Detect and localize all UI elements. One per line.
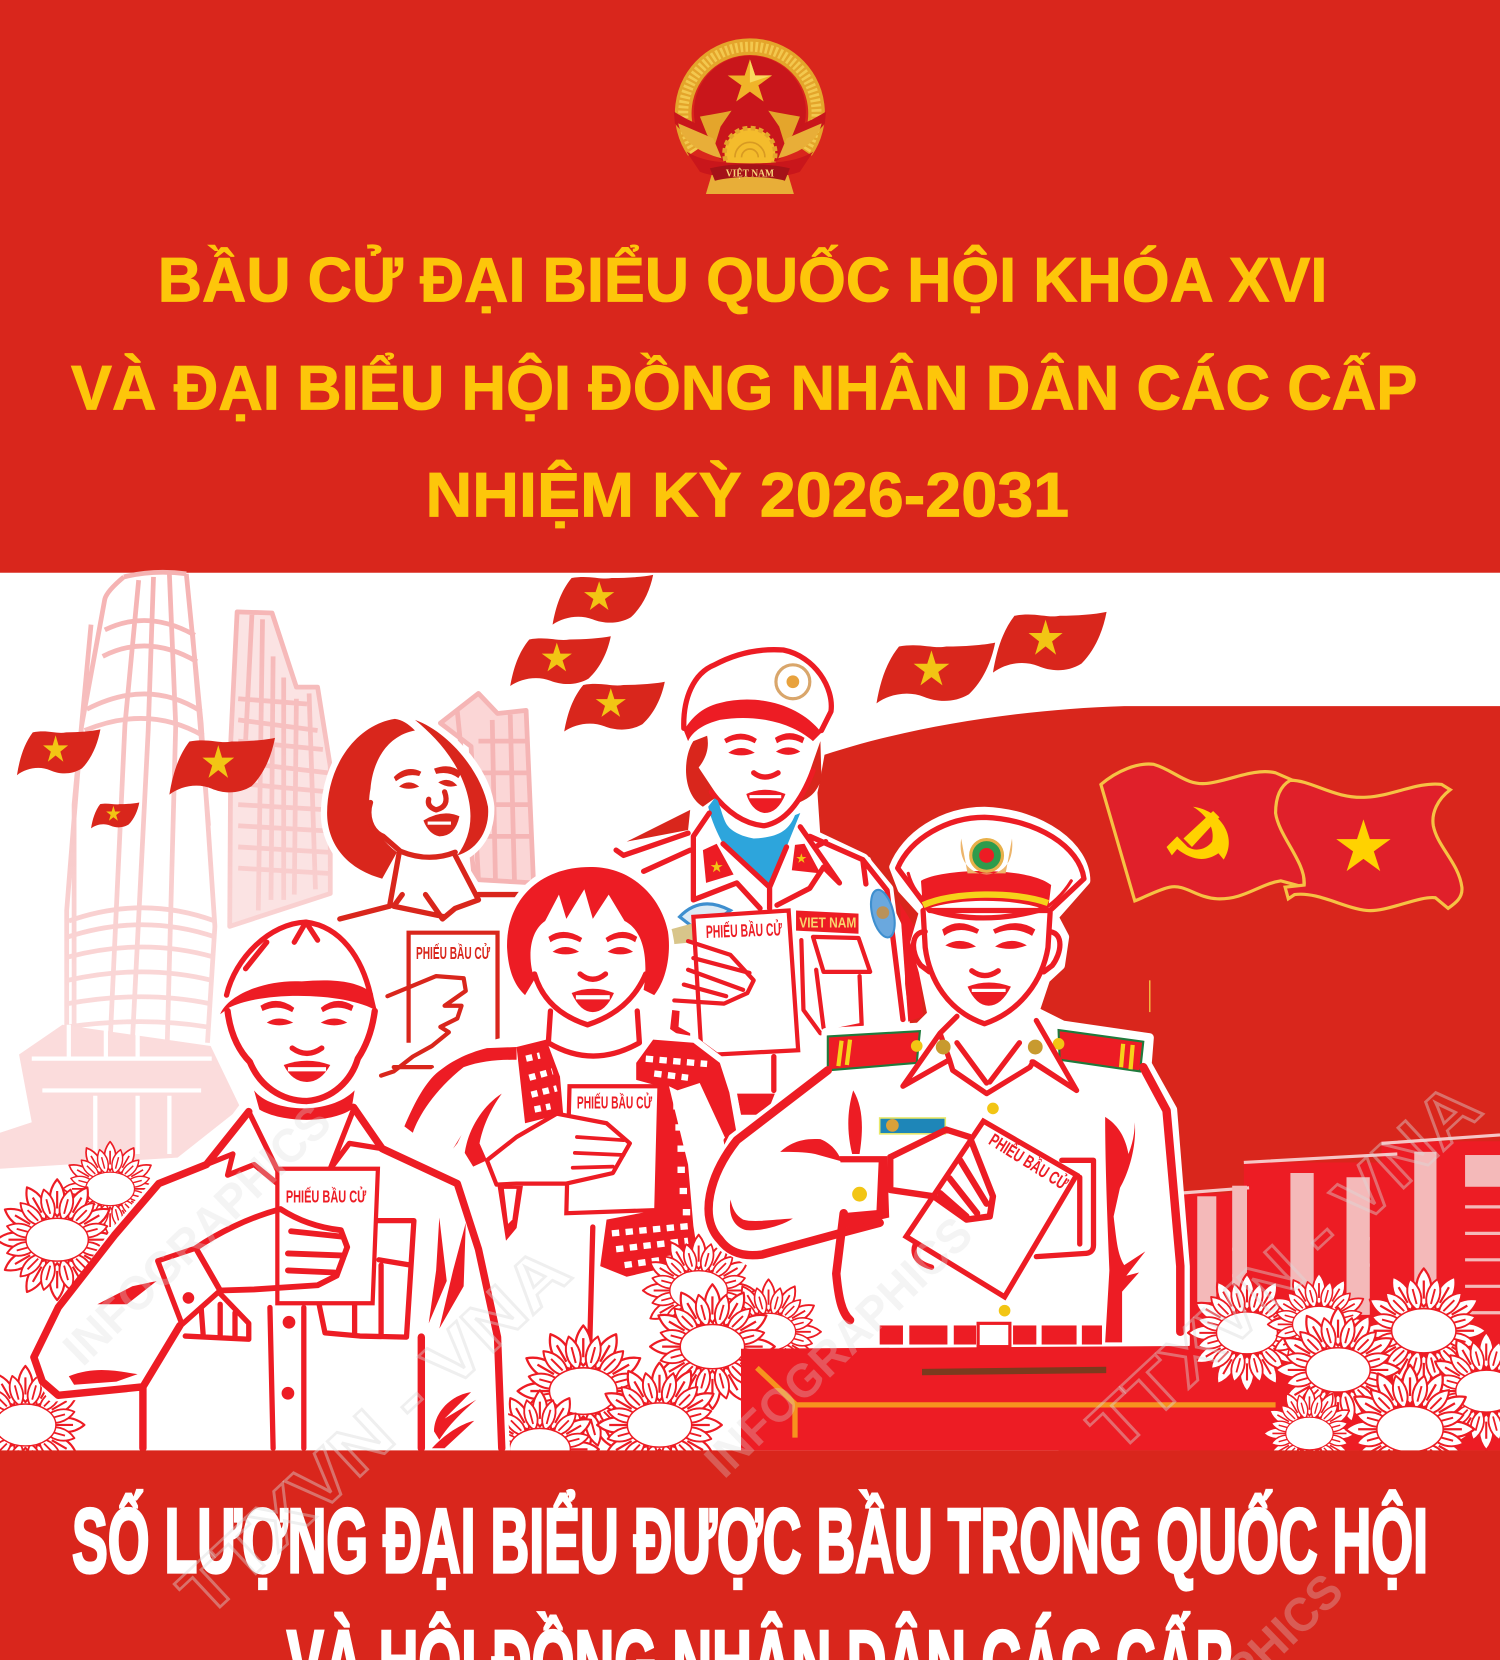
box edges [757,1368,1276,1438]
facial features [942,923,1035,936]
icon: national emblem: VIỆT NAM [726,167,775,180]
ballot [906,1121,1077,1297]
ballot: PHIẾU BẦU CỬ [577,1091,652,1112]
buildings: pink city skyline [0,572,534,1169]
bottom band [0,1450,1500,1660]
facial features [548,932,637,942]
ballot: PHIẾU BẦU CỬ [286,1186,366,1207]
ballot: PHIẾU BẦU CỬ [986,1129,1072,1194]
hair [327,719,415,879]
shoulder flap [627,810,690,842]
buildings: red city block [1180,1135,1500,1450]
plant leaf [432,1392,476,1448]
uniform outline [709,1067,1180,1332]
scarf right [600,1040,738,1277]
placket and buttons [270,1307,304,1448]
watermark: INFOGRAPHICS [53,1095,341,1376]
flowers at far left [0,1139,160,1487]
ballot [566,1086,659,1213]
party flag [1101,764,1304,901]
icon: national emblem [674,47,826,194]
ballot [409,933,498,1043]
watermark: INFOGRAPHICS [695,1207,983,1488]
national flag [1276,780,1462,911]
tower [67,572,215,1043]
blue scarf [708,798,800,887]
pocket [801,937,870,1033]
facial features [394,766,462,781]
cuff [158,1248,220,1324]
flowers in the middle [478,1232,824,1512]
ballot [277,1169,378,1303]
ballot [693,910,798,1054]
title: VÀ ĐẠI BIỂU HỘI ĐỒNG NHÂN DÂN CÁC CẤP [71,353,1417,424]
ballot box [741,1346,1290,1450]
collar and shoulders [340,853,526,919]
face [228,1011,375,1101]
figure: police officer voting [701,811,1186,1347]
hand [381,976,466,1076]
gap between officer and police officer [900,903,923,1022]
skirt lines [590,1227,593,1350]
watermark: TTXVN - VNA [163,1231,584,1631]
watermark: TTXVN - VNA [1074,1067,1495,1467]
name tag [796,910,859,934]
flags: small red star flags [17,575,1107,828]
cuff [839,1156,889,1228]
figure: worker in helmet [34,921,504,1452]
hat [898,817,1084,910]
ballot: PHIẾU BẦU CỬ [416,942,490,963]
scarf left [517,1040,563,1123]
title: BẦU CỬ ĐẠI BIỂU QUỐC HỘI KHÓA XVI [158,245,1327,316]
helmet [227,922,371,995]
hand [196,1209,347,1291]
hair [686,736,821,807]
left sleeve [404,1047,517,1133]
subtitle [72,1490,1428,1660]
figure: woman officer with blue scarf [616,650,908,1115]
left pocket [185,1294,249,1339]
rank insignia left [703,844,734,883]
title: NHIỆM KỲ 2026-2031 [426,460,1069,531]
hand [674,941,754,1004]
shirt folds [69,1217,466,1385]
header band [0,0,1500,573]
buttons [987,1103,999,1114]
flowers at right [1185,1265,1500,1497]
hand [890,1130,993,1220]
ballot: PHIẾU BẦU CỬ [705,918,782,942]
name tag: VIET NAM [799,915,856,931]
facial features [724,733,805,743]
collar [903,1016,1077,1094]
hair [507,867,669,995]
decorative thin gold line [1149,980,1150,1012]
epaulettes [828,1030,1143,1071]
face [923,910,1050,1024]
shirt outline [34,1107,502,1448]
red curved backdrop [815,706,1500,1450]
hat [684,650,831,730]
name badge [880,1118,945,1134]
watermark [53,1067,1495,1660]
low civic building [0,1025,239,1169]
cap badge [961,838,1012,874]
facial features [260,1001,354,1012]
right pocket [318,1221,414,1337]
uniform outline [616,813,903,1020]
figure: woman looking up [327,719,529,1076]
mid tower [230,612,330,926]
pocket [914,1160,1094,1267]
flags: party flag and national flag [1101,764,1462,911]
rank insignia right [792,844,820,873]
sleeve fold [453,1094,502,1167]
hand [487,1114,630,1185]
ballot slot [922,1367,1106,1375]
belt [880,1323,1102,1347]
arm badge [680,904,730,932]
shoulder patch [867,887,899,940]
right tower [440,693,534,883]
uniform folds [730,1090,1145,1342]
figure: woman with checked scarf [404,867,739,1450]
title [71,245,1417,531]
